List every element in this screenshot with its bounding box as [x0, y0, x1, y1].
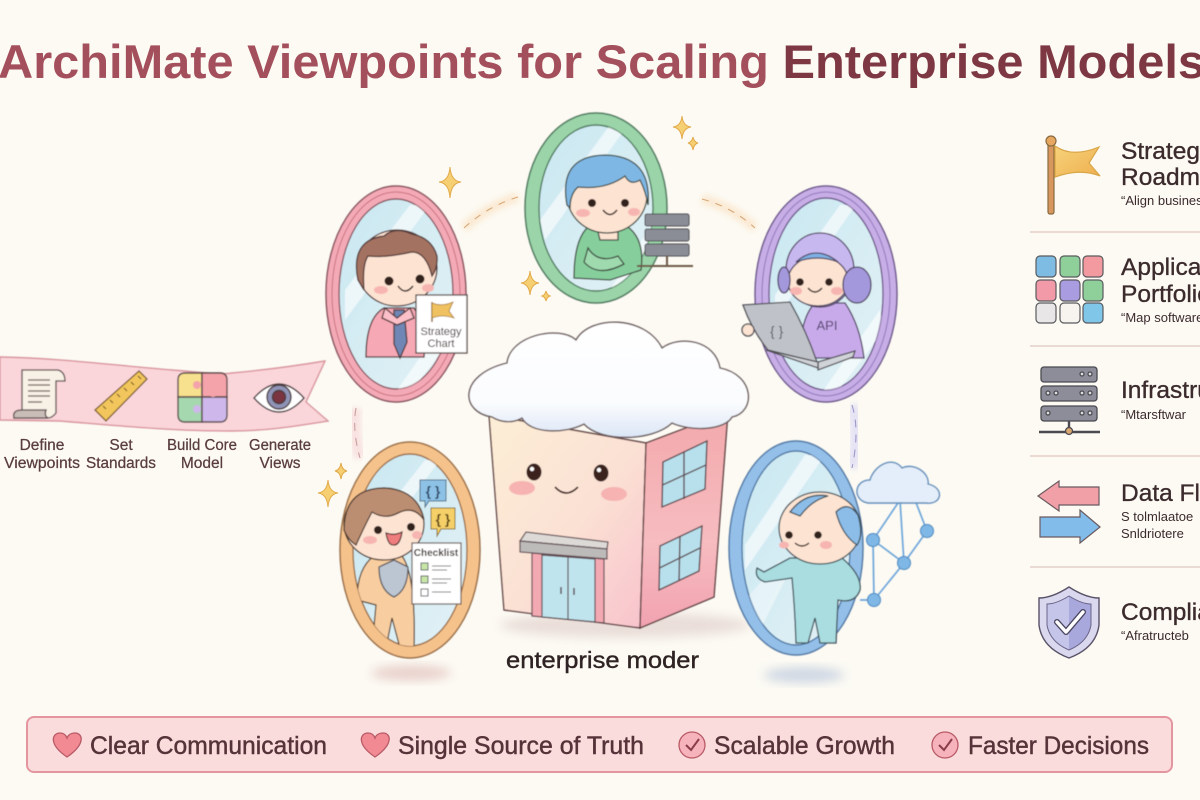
step labels: Define [20, 437, 64, 454]
icon: data flow arrows [1038, 481, 1100, 543]
icon: laptop: { } [770, 323, 784, 339]
cloud [469, 322, 748, 437]
icon: laptop [742, 302, 855, 370]
sign: strategy chart: Chart [428, 338, 454, 350]
ribbon [0, 357, 328, 431]
windows [659, 441, 707, 590]
icon: checklist: Checklist [414, 548, 459, 559]
icon: check badge [932, 732, 958, 758]
figure: business person [356, 230, 437, 358]
icon: application grid [1036, 256, 1103, 323]
item: data flow: S tolmlaatoe [1121, 509, 1193, 524]
benefit text: Clear Communication [90, 732, 327, 760]
door [532, 553, 604, 623]
mirror: pink strategy [326, 186, 467, 402]
panel: benefits bar [27, 717, 1172, 772]
item: compliance [1121, 599, 1200, 643]
step labels: Model [181, 455, 223, 472]
icon: ruler [95, 371, 147, 421]
face [509, 464, 627, 501]
figure: compliance person [357, 556, 414, 648]
icon: check badge [679, 732, 705, 758]
item: compliance: “Afratructeb [1121, 628, 1189, 643]
icon: cloud network [857, 462, 939, 606]
icon: flag [1046, 136, 1100, 214]
icon: server [1039, 367, 1100, 434]
mirror: orange compliance [340, 442, 480, 681]
face [374, 274, 434, 294]
icon: eye [254, 384, 304, 412]
icon: shield check [1039, 587, 1099, 658]
icon: shield [379, 560, 408, 597]
label: API: API [817, 318, 837, 333]
step labels: Viewpoints [4, 455, 80, 472]
item: application portfolio [1121, 254, 1200, 325]
icon: heart [361, 733, 389, 757]
benefit text: Scalable Growth [714, 732, 895, 760]
benefit text: Faster Decisions [968, 732, 1149, 760]
item: data flow: Snldriotere [1121, 526, 1184, 541]
panel: viewpoint list [1030, 136, 1200, 658]
sparkles [318, 116, 698, 507]
mirror: green infrastructure [525, 113, 693, 303]
item: data flow [1121, 480, 1200, 541]
item: infrastructure [1121, 377, 1200, 422]
mirror: purple application [742, 186, 897, 402]
icon: checklist [412, 543, 461, 604]
icon: code bubbles: { } [436, 511, 451, 527]
item: infrastructure: “Mtarsftwar [1121, 407, 1187, 422]
figure: developer [778, 233, 871, 358]
icon: server stack [637, 214, 693, 266]
icon: code bubbles: { } [426, 483, 441, 499]
icon: heart [53, 733, 81, 757]
icon: scroll [14, 370, 65, 418]
figure: data person [756, 492, 861, 643]
face [363, 523, 422, 545]
awning [520, 532, 608, 559]
step labels: Build Core [167, 437, 237, 454]
icon: code bubbles [420, 480, 455, 536]
icon: puzzle [178, 373, 227, 422]
face [576, 199, 640, 217]
sign: strategy chart: Strategy [421, 326, 462, 338]
benefit text: Single Source of Truth [398, 732, 644, 760]
step labels: Set [109, 437, 133, 454]
dividers [1030, 232, 1200, 567]
label: enterprise model: enterprise moder [506, 647, 699, 673]
title: ArchiMate Viewpoints for Scaling Enterprise Models [0, 35, 1200, 88]
mirror: blue data [729, 441, 939, 683]
face [790, 278, 843, 295]
step labels: Generate [249, 437, 311, 454]
step labels: Views [259, 455, 301, 472]
connector arcs between mirrors [355, 197, 856, 468]
figure: green hoodie person [566, 155, 648, 280]
banner: process steps [0, 357, 328, 431]
item: strategic roadmap [1121, 138, 1200, 208]
face [779, 531, 832, 549]
sign: strategy chart [416, 295, 467, 353]
building [469, 322, 750, 638]
step labels [4, 437, 311, 472]
step labels: Standards [86, 455, 156, 472]
